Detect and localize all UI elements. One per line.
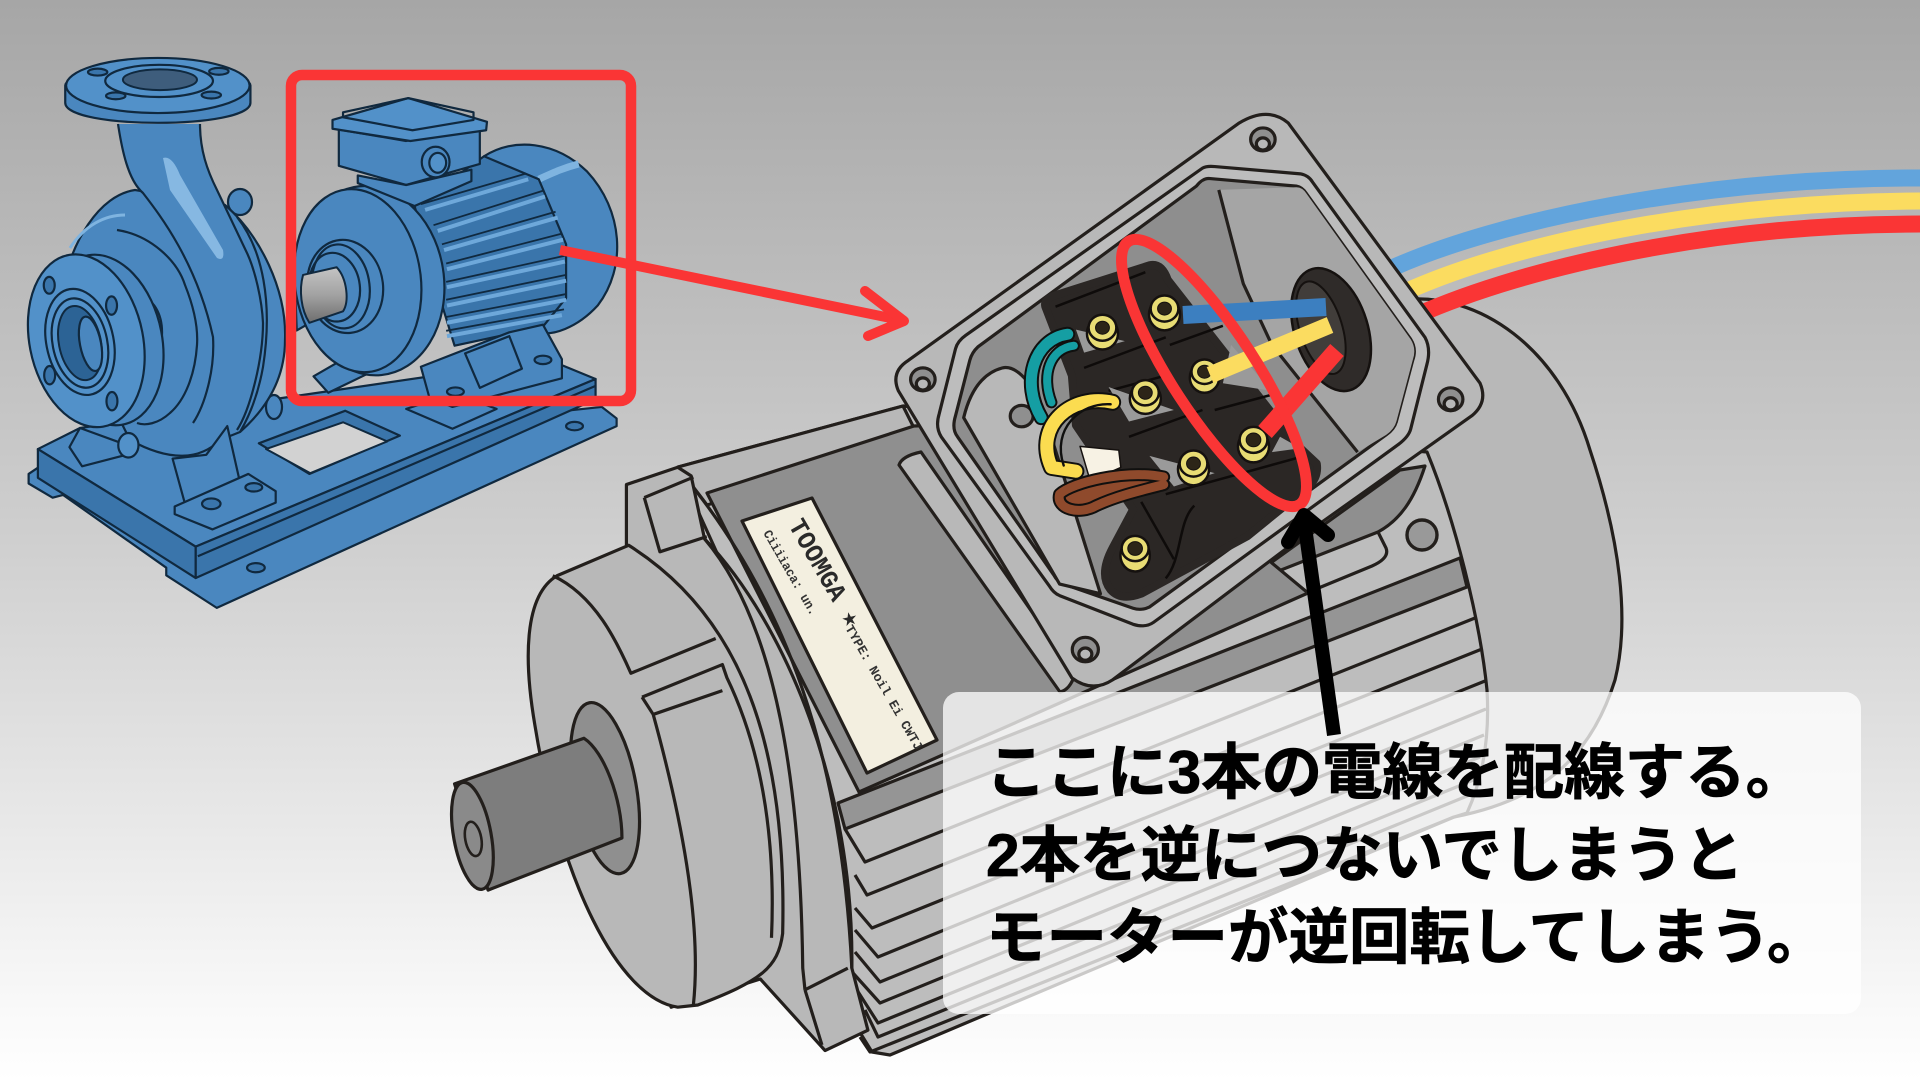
pump discharge elbow [118,124,263,430]
flange plate [626,467,868,1051]
fin lines [845,618,1486,1052]
red arrow: pump motor to close-up [560,250,904,336]
mount bolt hole [1407,520,1437,550]
callout text: 2本を逆につないでしまうと [986,821,1744,889]
shaft center hole [462,820,484,857]
red wire inside box [1265,350,1337,432]
gasket ring [938,166,1429,626]
nameplate: TYPE: Noil Ei CWTJ [842,622,926,753]
yellow jumper wire [1047,401,1113,471]
mount shadow under terminal box [1180,466,1425,628]
flange details [644,477,852,1045]
external cables [1392,178,1920,316]
fin channel [838,558,1467,829]
motor terminal box [333,98,487,206]
blue wire inside box [1183,307,1326,315]
top rail [678,406,920,505]
motor fins [415,156,566,346]
red ellipse highlight [1093,218,1335,528]
motor front bell and shaft [444,467,868,1051]
callout card [943,692,1861,1014]
flange bolts [911,128,1463,662]
terminal box close-up [896,114,1483,686]
teal jumper wire [1031,334,1074,418]
illustration: gray motor body [678,299,1622,1055]
pump volute casing [60,189,285,456]
pump inlet flange [14,246,178,436]
label paper [1080,446,1121,481]
panel hole [1010,405,1033,427]
dark plate [707,420,1308,792]
red highlight frame [291,75,631,401]
nameplate: TOOMGA ★ [781,514,867,633]
callout text: ここに3本の電線を配線する。 [986,738,1806,806]
interior lower panel [964,368,1100,594]
yellow wire inside box [1210,325,1330,375]
nameplate [742,498,937,773]
shaft recess [559,697,651,879]
bell cover [528,545,783,1007]
fin block [678,406,1488,1055]
cover ribs [553,576,772,1005]
shaft [455,738,622,890]
terminal screws [1087,296,1269,571]
illustration: blue centrifugal pump [14,58,617,608]
nameplate: Ciiiiaca: un. [760,528,821,618]
brown jumper wire [1059,475,1164,510]
callout text [986,738,1828,971]
shaft end [444,779,501,892]
interior wall edge [1219,190,1358,452]
side panel [899,452,1075,692]
motor front bell [284,179,455,382]
terminal block [1045,265,1317,597]
interior right wall [1219,187,1414,452]
box interior [954,178,1414,609]
fan cover [1380,299,1622,817]
motor shaft sleeve [295,269,314,330]
box flange [896,114,1483,686]
pump base plate [29,359,617,608]
pump flange, feet and motor [14,58,617,529]
pump feet [69,426,276,529]
grommet [1277,259,1385,400]
pump top flange [65,58,250,123]
motor feet [314,325,562,407]
callout text: モーターが逆回転してしまう。 [986,903,1828,971]
mount pad outline [1180,532,1387,645]
motor fan cover [484,145,617,333]
